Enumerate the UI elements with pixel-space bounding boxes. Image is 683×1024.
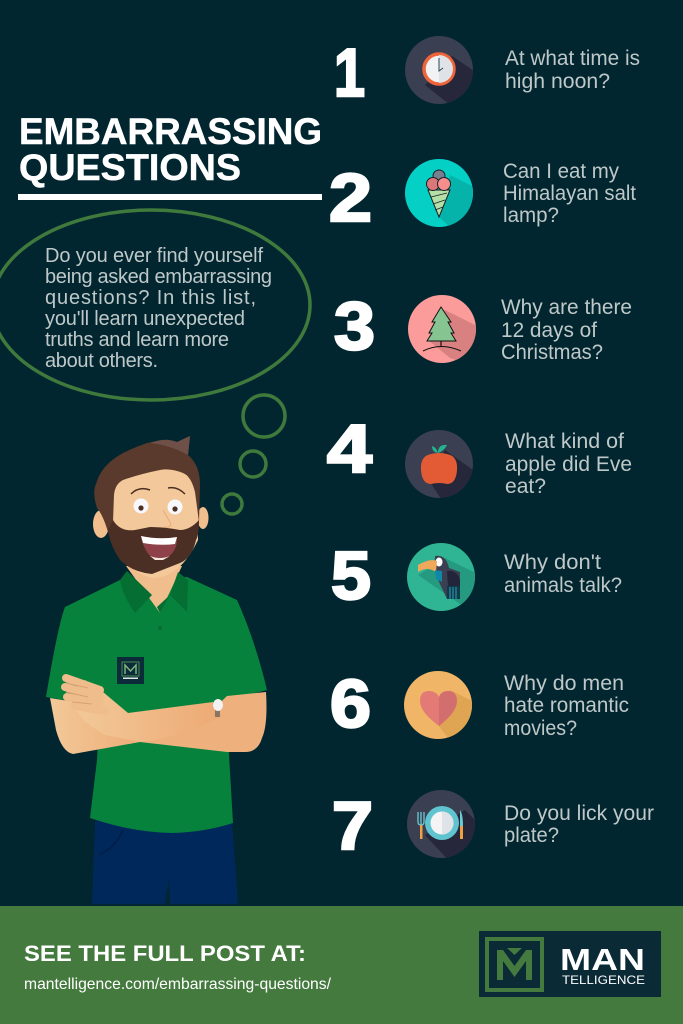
trousers [92,820,238,904]
item 5: 5 [331,538,371,614]
character: man with crossed arms [46,436,267,904]
title [18,111,322,200]
icon: clock [405,36,473,104]
question 4: eat? [505,475,546,498]
question 6 [504,672,629,740]
question 2: Can I eat my [503,160,619,183]
item 1: 1 [334,35,365,111]
shirt [46,566,267,833]
item 6: 6 [330,666,371,742]
intro text: about others. [45,350,158,372]
intro text: questions? In this list, [45,287,256,309]
item 4: 4 [327,411,372,487]
question 4 [505,430,632,498]
arm right [140,692,266,752]
question 1: At what time is [505,47,640,70]
question 6: Why do men [504,672,624,695]
question 2 [503,160,636,227]
question 5: animals talk? [504,574,622,597]
item 2 [330,159,636,227]
item 3 [334,295,632,363]
logo [479,931,661,997]
question 4: apple did Eve [505,453,632,476]
question 3: Christmas? [501,341,603,364]
footer call to action: SEE THE FULL POST AT: [24,941,306,966]
intro text: truths and learn more [45,329,229,351]
thought bubble [0,210,310,514]
intro text [45,245,272,372]
footer url: mantelligence.com/embarrassing-questions/ [24,976,332,993]
item 7: 7 [332,788,373,864]
question 6: hate romantic [504,694,629,717]
question 6: movies? [504,717,577,740]
arm left [50,698,150,754]
head [93,436,208,578]
question 2: lamp? [503,204,559,227]
question 5: Why don't [504,551,601,574]
intro text: being asked embarrassing [45,266,272,288]
intro text: you'll learn unexpected [45,308,245,330]
item 4 [326,424,632,498]
footer [0,906,683,1024]
logo: MAN [560,942,645,977]
item 7 [334,790,654,858]
icon: heart [404,671,472,739]
icon: tree [408,295,476,363]
title: EMBARRASSING [19,111,322,152]
question 3 [501,296,632,364]
question 5 [504,551,622,597]
question 1 [505,47,640,93]
forearm and hand [65,678,222,742]
item 1 [336,36,640,104]
question 7 [504,802,654,847]
icon: apple [405,430,473,498]
shirt logo [117,657,144,684]
question 3: 12 days of [501,319,597,342]
mouth [141,536,177,560]
logo: TELLIGENCE [562,973,645,987]
intro text: Do you ever find yourself [45,245,263,267]
question 4: What kind of [505,430,624,453]
watch [213,699,223,717]
item 6 [331,671,628,739]
item 3: 3 [334,288,375,364]
item 5 [332,543,622,611]
item 2: 2 [329,160,372,236]
question 2: Himalayan salt [503,182,636,205]
question 3: Why are there [501,296,632,319]
icon: ice cream [405,159,473,227]
title: QUESTIONS [19,147,241,188]
question 7: Do you lick your [504,802,654,825]
icon: toucan [407,543,480,611]
question 7: plate? [504,824,559,847]
beard [108,520,199,574]
hair [94,436,200,532]
icon: plate [407,790,475,858]
eyes [131,488,185,527]
question 1: high noon? [505,70,610,93]
